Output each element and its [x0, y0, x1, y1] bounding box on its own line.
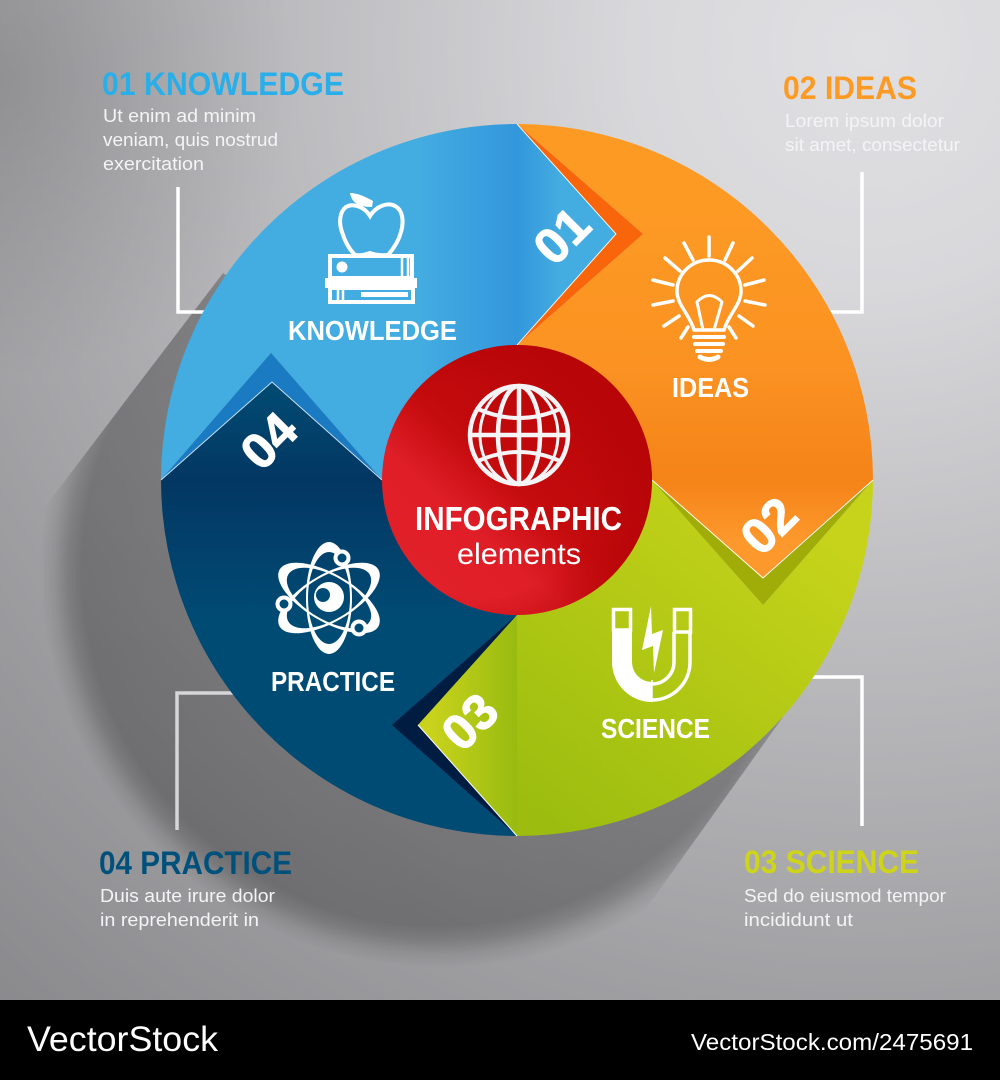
tab: ideas number [652, 480, 873, 578]
number 03: 03 [431, 683, 509, 761]
icon: light bulb [653, 237, 765, 360]
number 04: 04 [230, 401, 309, 480]
body: 04 practice: in reprehenderit in [100, 910, 259, 930]
bracket: science [805, 677, 862, 826]
body: 01 knowledge: veniam, quis nostrud [103, 130, 278, 150]
segment: ideas [517, 124, 873, 578]
fold shadow: science tab [652, 480, 873, 605]
center hub [382, 345, 652, 615]
text block: 02 ideas [783, 70, 960, 155]
body: 02 ideas: sit amet, consectetur [785, 135, 960, 155]
icon: globe [470, 386, 568, 484]
body: 01 knowledge [103, 106, 278, 174]
footer bar [0, 1000, 1000, 1080]
bracket: practice [177, 693, 240, 830]
segment: knowledge [161, 124, 517, 480]
segment: science [418, 480, 873, 836]
tab: science number [418, 615, 517, 836]
tab: knowledge number [517, 124, 616, 345]
body: 03 science: incididunt ut [744, 910, 853, 930]
body: 04 practice: Duis aute irure dolor [100, 886, 275, 906]
number 01: 01 [523, 197, 601, 275]
fold shadow: practice tab [392, 615, 517, 836]
number 02: 02 [730, 487, 808, 565]
label: science: SCIENCE [601, 713, 710, 744]
body: 04 practice [100, 886, 275, 930]
tab: practice number [161, 382, 382, 480]
label: practice: PRACTICE [271, 666, 395, 697]
body: 03 science: Sed do eiusmod tempor [744, 886, 946, 906]
title: infographic: INFOGRAPHIC [415, 500, 622, 537]
long cast shadow [0, 273, 783, 1000]
label: knowledge: KNOWLEDGE [288, 315, 457, 346]
body: 03 science [744, 886, 946, 930]
label: ideas: IDEAS [672, 372, 749, 403]
icon: apple on books [325, 193, 417, 303]
text block: 03 science [744, 844, 946, 930]
fold shadow: knowledge tab [161, 353, 382, 480]
heading: 02 ideas: 02 IDEAS [783, 70, 917, 106]
body: 01 knowledge: Ut enim ad minim [103, 106, 256, 126]
text block: 04 practice [99, 845, 292, 930]
segment: practice [161, 382, 517, 836]
subtitle: elements: elements [457, 538, 581, 571]
footer url: VectorStock.com/2475691 [691, 1029, 973, 1055]
heading: 04 practice: 04 PRACTICE [99, 845, 292, 881]
heading: 03 science: 03 SCIENCE [744, 844, 919, 880]
fold shadow: ideas tab [517, 124, 643, 345]
body: 02 ideas [785, 111, 960, 155]
icon: magnet [612, 606, 690, 702]
body: 02 ideas: Lorem ipsum dolor [785, 111, 944, 131]
bracket: ideas [820, 172, 862, 312]
icon: atom [268, 542, 390, 654]
text block: 01 knowledge [102, 66, 344, 174]
bracket: knowledge [178, 187, 215, 312]
heading: 01 knowledge: 01 KNOWLEDGE [102, 66, 344, 102]
footer brand: VectorStock [27, 1020, 219, 1059]
body: 01 knowledge: exercitation [103, 154, 204, 174]
